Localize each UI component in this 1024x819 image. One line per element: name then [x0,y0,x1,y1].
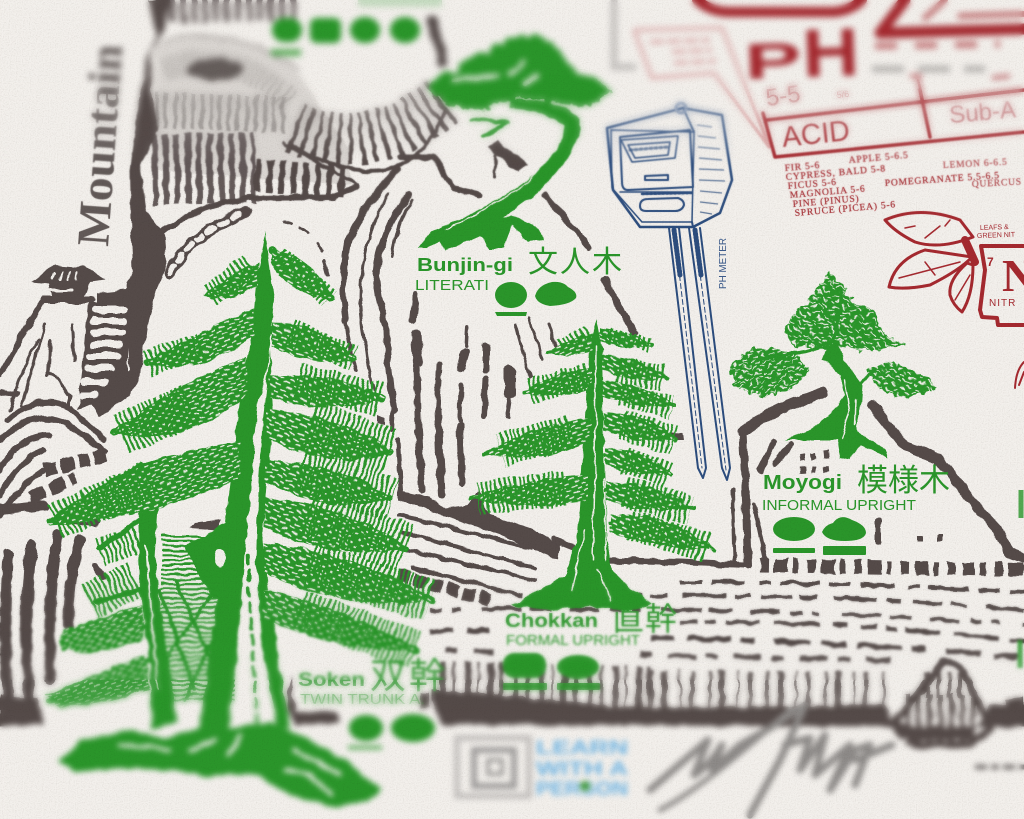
tree pH list: APPLE 5-6.5 [848,150,909,166]
Moyogi hill outline [733,393,1024,570]
grey bracket [614,0,636,67]
bottom tilt-shift blur [0,570,1024,680]
tree: Bunjin-gi literati [415,36,622,316]
pH heading: H [801,14,860,92]
pH meter [607,103,732,480]
footer note [975,764,1024,770]
tree pH list: SPRUCE (PICEA) 5-6 [794,199,896,219]
pH heading: P [743,32,802,90]
twin trunk english: TWIN TRUNK A. [300,691,425,708]
pH scale panel [614,0,1024,219]
tree pH list: FIR 5-6 [784,160,821,174]
twin trunk lower left boughs [48,515,150,702]
twin trunk right boughs [264,250,432,650]
logo text: WITH A [536,759,628,780]
ACID label: ACID [780,115,851,154]
formal kanji: 直幹 [612,601,677,637]
tree pH list: QUERCUS [972,176,1022,190]
probes [669,228,730,480]
mountain label: Mountain [67,43,132,248]
literati name: Bunjin-gi [417,255,513,275]
twin trunk upper left boughs [50,272,258,522]
leafs caption: LEAFS & [980,224,1009,232]
tree: Soken twin trunk [45,233,445,806]
leaf two [889,250,972,288]
literati crown [428,36,612,110]
logo badge [457,738,529,796]
nitrogen leaves: 7 [987,255,994,269]
leaf one [885,212,973,245]
pH heading [743,14,860,94]
logo text: LEARN [536,738,628,759]
informal english: INFORMAL UPRIGHT [762,497,916,514]
meter side hatching [697,125,725,214]
rope on cliff [170,212,328,275]
meter face [620,130,693,190]
meter button [640,198,684,211]
edge fragments [1015,362,1024,388]
logo text [536,738,628,800]
formal branches right [600,335,714,550]
informal trunk [760,290,888,460]
tree pH list: CYPRESS, BALD 5-8 [785,163,886,183]
tree: Moyogi informal upright [730,272,950,555]
tree pH list: MAGNOLIA 5-6 [789,183,866,201]
meter knob [645,175,668,180]
ground dashes [430,582,1024,660]
vertical cliff columns at lower left [0,535,104,726]
wave strata on the left [0,402,108,522]
formal name: Chokkan [505,611,598,632]
icon: twin trunk pot crowns [348,714,435,750]
acid box [763,90,1024,157]
literati english: LITERATI [415,277,489,294]
literati kanji: 文人木 [528,246,622,279]
twin trunk kanji: 双幹 [370,655,445,696]
leaf three [950,263,973,312]
nitrogen card [980,246,1024,325]
twin trunk name: Soken [298,670,365,691]
tree pH list: PINE (PINUS) [792,193,860,210]
scale numbers: 5-5 [764,80,802,112]
top red panel [697,0,862,12]
formal english: FORMAL UPRIGHT [506,632,640,649]
pH scale panel: 5/6 [836,89,850,100]
formal branches left [470,342,592,498]
signature [650,705,892,815]
nitrogen leaves: NITR [989,298,1016,309]
informal name: Moyogi [763,472,842,494]
icon: informal pot crowns [773,517,866,555]
scale ticks [875,44,1000,46]
tree pH list: LEMON 6-6.5 [943,157,1008,171]
small right hill [895,660,990,745]
right cliff wall strokes [343,168,510,495]
red triangle [880,0,1024,33]
formal trunk [470,318,714,610]
tree pH list [784,150,1022,219]
tree: Chokkan formal upright [470,318,714,690]
icon: formal pot crowns [503,653,600,690]
literati trunk [418,62,580,250]
pink callout [634,28,770,148]
twin trunk root base [57,722,382,806]
ladder and hut on the left tower [0,265,128,410]
slanted ground stripes [190,415,745,600]
informal kanji: 模様木 [857,463,950,498]
mountain spine and cliff head [88,0,635,418]
tree pH list: FICUS 5-6 [787,177,837,192]
tree pH list: POMEGRANATE 5.5-6.5 [884,170,1000,189]
logo text: PERSON [536,779,628,800]
icon row at top [271,0,442,56]
meter label: PH METER [717,238,729,289]
top tilt-shift blur [84,0,1024,159]
nitrogen leaves: GREEN NIT [977,232,1016,240]
horizon strip with teeth [288,672,1024,740]
informal crown [730,272,938,399]
twin trunk centre web [161,535,235,700]
icon: literati pot crowns [495,282,576,316]
nitrogen leaves [885,212,1024,388]
green edge fragments [1020,490,1021,668]
meter body [607,108,732,227]
twin trunk main trunks [45,233,434,806]
Sub-A label: Sub-A [948,96,1017,129]
